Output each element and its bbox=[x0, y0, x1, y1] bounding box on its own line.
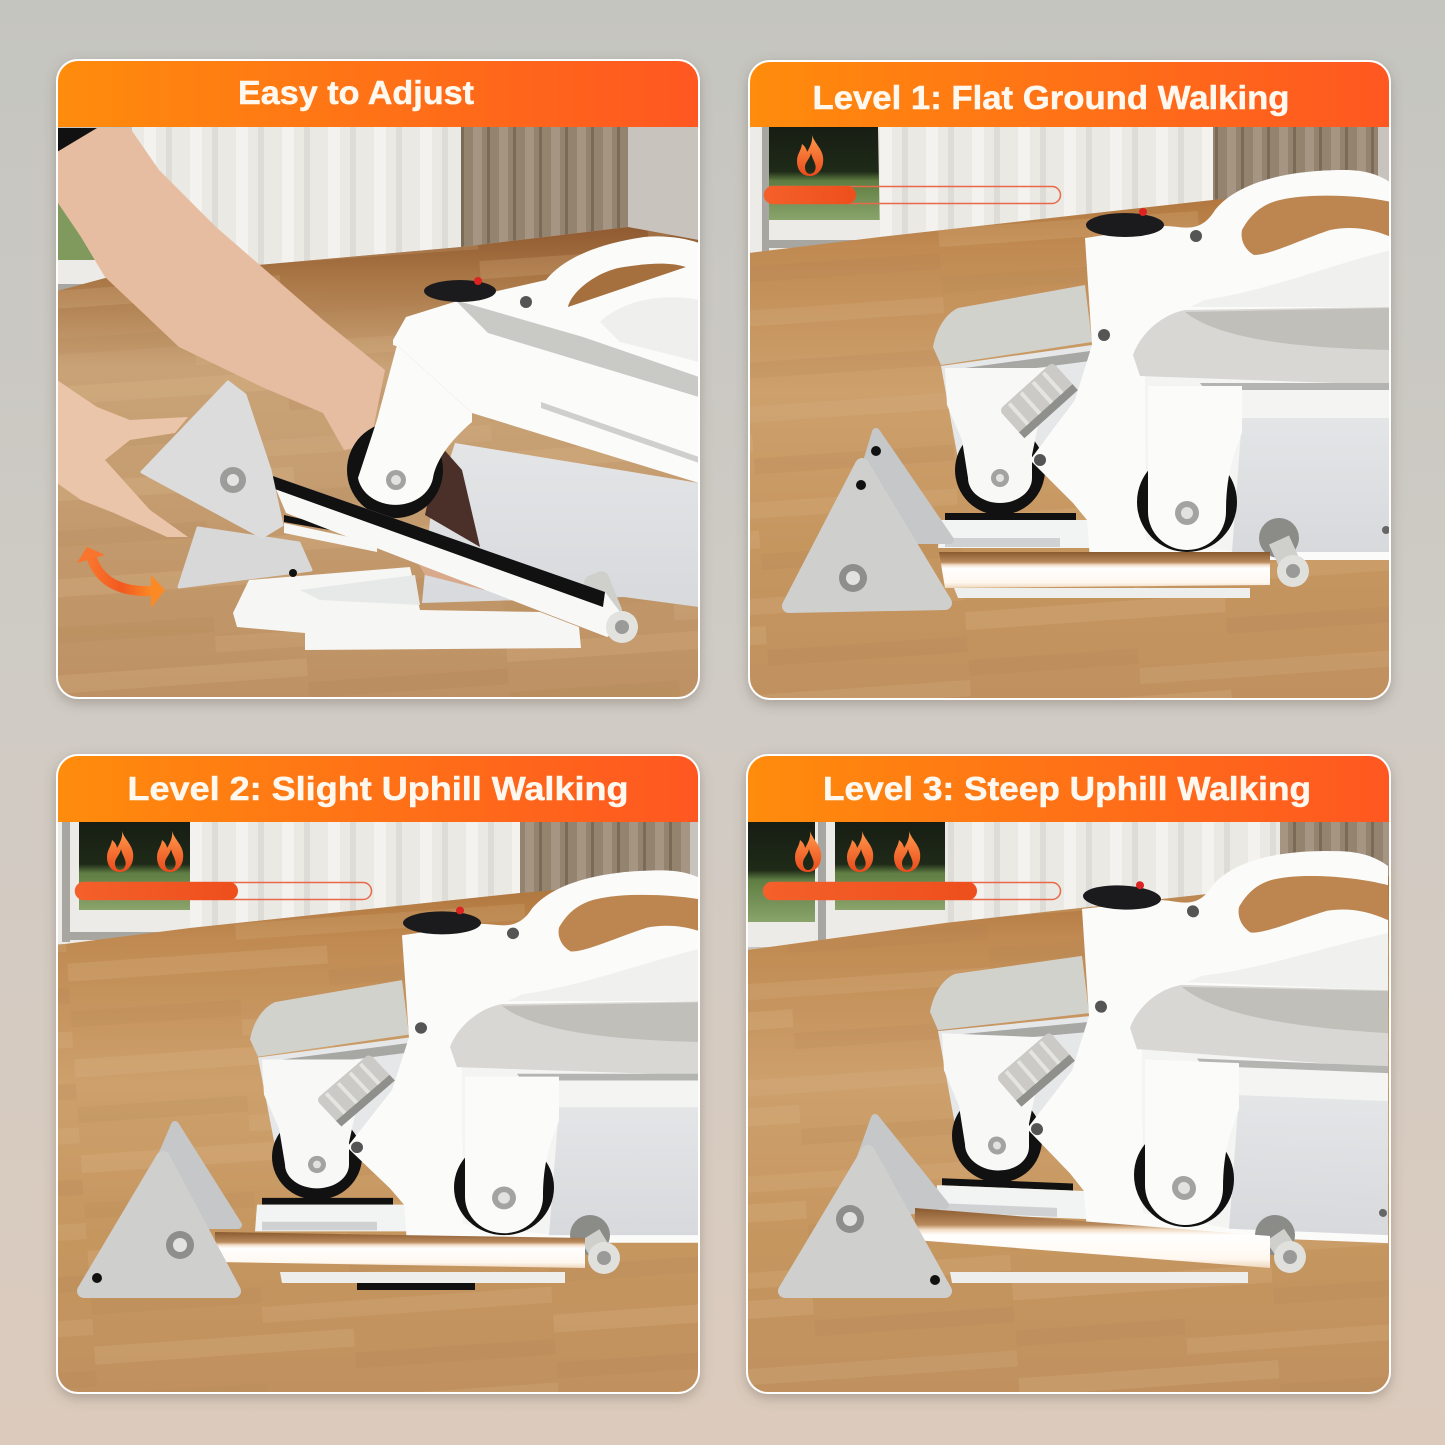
icon: orange double arrow bbox=[77, 547, 165, 608]
panel: level 1 bbox=[748, 60, 1391, 700]
machine tilted bbox=[233, 236, 699, 650]
room backdrop bbox=[747, 822, 1390, 1393]
heading: Level 2: Slight Uphill Walking bbox=[128, 770, 628, 807]
heading: Easy to Adjust bbox=[238, 74, 474, 111]
icon: flames bbox=[795, 831, 920, 872]
header bar bbox=[57, 755, 699, 822]
room backdrop bbox=[57, 822, 699, 1393]
panel: level 2 bbox=[56, 754, 708, 1394]
heading: Level 1: Flat Ground Walking bbox=[812, 79, 1290, 116]
header bar bbox=[57, 60, 699, 127]
panel: easy to adjust bbox=[56, 59, 700, 699]
machine bbox=[250, 870, 708, 1243]
header bar bbox=[747, 755, 1390, 822]
icon: flame bbox=[797, 135, 823, 176]
intensity bar bbox=[764, 186, 1060, 204]
adjusting triangles and rail bbox=[142, 382, 638, 643]
machine bbox=[930, 835, 1388, 1243]
room backdrop bbox=[57, 127, 699, 699]
heading: Level 3: Steep Uphill Walking bbox=[823, 770, 1311, 807]
machine bbox=[933, 170, 1391, 560]
triangle stand and rail bbox=[789, 432, 1309, 606]
header bar bbox=[749, 61, 1390, 127]
triangle stand and rail bbox=[84, 1125, 620, 1291]
panel: level 3 bbox=[746, 754, 1391, 1394]
intensity bar bbox=[763, 882, 1060, 900]
intensity bar bbox=[75, 882, 372, 900]
icon: flames bbox=[107, 831, 183, 872]
triangle stand and rail bbox=[785, 1118, 1306, 1291]
room backdrop bbox=[749, 127, 1390, 699]
arm and hand bbox=[57, 128, 385, 537]
